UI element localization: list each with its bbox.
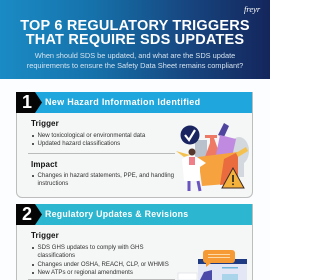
panel: new hazard information: instructions bbox=[38, 180, 68, 187]
heading: trigger: Trigger bbox=[31, 119, 59, 128]
panel: regulatory updates: New ATPs or regional amendments bbox=[38, 268, 133, 276]
title: TOP 6 REGULATORY TRIGGERS bbox=[20, 18, 250, 34]
title bbox=[20, 18, 250, 48]
card body 2 bbox=[16, 204, 253, 280]
panel: new hazard information: Updated hazard classifications bbox=[38, 140, 120, 146]
number badge 2 bbox=[16, 204, 42, 225]
panel: regulatory updates bbox=[16, 204, 253, 280]
title: THAT REQUIRE SDS UPDATES bbox=[26, 32, 244, 48]
number badge 1: 1 bbox=[22, 92, 32, 112]
panel: new hazard information: New toxicological or environmental data bbox=[38, 132, 145, 138]
panel: regulatory updates: SDS GHS updates to comply with GHS bbox=[38, 244, 144, 250]
logo: freyr bbox=[244, 4, 260, 14]
bullets: trigger 2 bbox=[32, 244, 169, 276]
bullets: trigger bbox=[32, 132, 146, 146]
subtitle: When should SDS be updated, and what are the SDS update bbox=[35, 50, 235, 60]
card 2 title: Regulatory Updates & Revisions bbox=[45, 209, 188, 219]
card 2 header bbox=[16, 204, 252, 225]
number badge 2: 2 bbox=[22, 204, 32, 224]
header banner bbox=[0, 0, 270, 79]
heading: trigger 2: Trigger bbox=[31, 231, 59, 240]
card body 1 bbox=[16, 92, 253, 198]
card 1 title: New Hazard Information Identified bbox=[45, 97, 200, 107]
illustration: browser with speech bubble bbox=[178, 250, 247, 280]
panel: new hazard information bbox=[16, 92, 253, 198]
subtitle: requirements to ensure the Safety Data Sheet remains compliant? bbox=[27, 60, 243, 70]
heading: impact: Impact bbox=[31, 160, 57, 168]
subtitle bbox=[27, 50, 243, 70]
number badge 1 bbox=[16, 92, 42, 113]
panel: regulatory updates: Changes under OSHA, REACH, CLP, or WHMIS bbox=[38, 260, 169, 268]
panel: new hazard information: Changes in hazard statements, PPE, and handling bbox=[38, 172, 174, 178]
illustration: scientist with box bbox=[176, 123, 249, 192]
panel: regulatory updates: classifications bbox=[38, 252, 75, 259]
card 1 header bbox=[16, 92, 252, 113]
bullets: impact bbox=[32, 172, 174, 187]
